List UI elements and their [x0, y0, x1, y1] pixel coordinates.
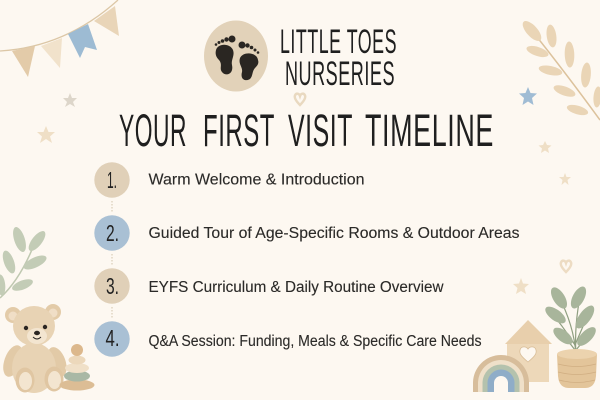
logo badge: [204, 20, 268, 92]
step 4: Q&A Session: Funding, Meals & Specific Care Needs: [148, 333, 482, 350]
title: FIRST: [203, 105, 275, 156]
title: TIMELINE: [365, 105, 494, 156]
step 1: 1.: [107, 167, 117, 193]
icon: heart right: [561, 261, 571, 272]
icon: beige branch top right: [520, 18, 600, 120]
icon: potted plant: [543, 284, 599, 388]
decorative stars left: [37, 93, 77, 143]
step 3: [94, 268, 444, 304]
step 1: [94, 162, 365, 198]
icon: teddy bear: [0, 304, 70, 393]
timeline: [94, 162, 520, 357]
title: [119, 105, 494, 156]
logo name line 1: LITTLE TOES: [280, 23, 397, 61]
decorative stars right: [513, 87, 571, 294]
connectors: [111, 201, 113, 319]
step 2: [94, 215, 520, 251]
bunting banner: [0, 0, 119, 77]
logo: [204, 20, 397, 93]
title: YOUR: [119, 105, 187, 156]
step 1: Warm Welcome & Introduction: [148, 172, 364, 188]
step 2: Guided Tour of Age-Specific Rooms & Outdoor Areas: [148, 225, 520, 242]
icon: wooden house: [505, 320, 552, 382]
logo name line 2: NURSERIES: [285, 55, 395, 93]
step 4: [94, 321, 482, 357]
icon: footprints: [215, 36, 259, 80]
title: VISIT: [288, 105, 353, 156]
icon: wooden rainbow: [473, 355, 529, 392]
step 2: 2.: [106, 220, 119, 246]
icon: sage branch left: [0, 225, 48, 298]
icon: ring stacker toy: [60, 344, 94, 390]
step 3: EYFS Curriculum & Daily Routine Overview: [148, 279, 444, 296]
icon: heart above title: [295, 94, 305, 105]
step 4: 4.: [106, 325, 120, 351]
step 3: 3.: [106, 273, 119, 299]
